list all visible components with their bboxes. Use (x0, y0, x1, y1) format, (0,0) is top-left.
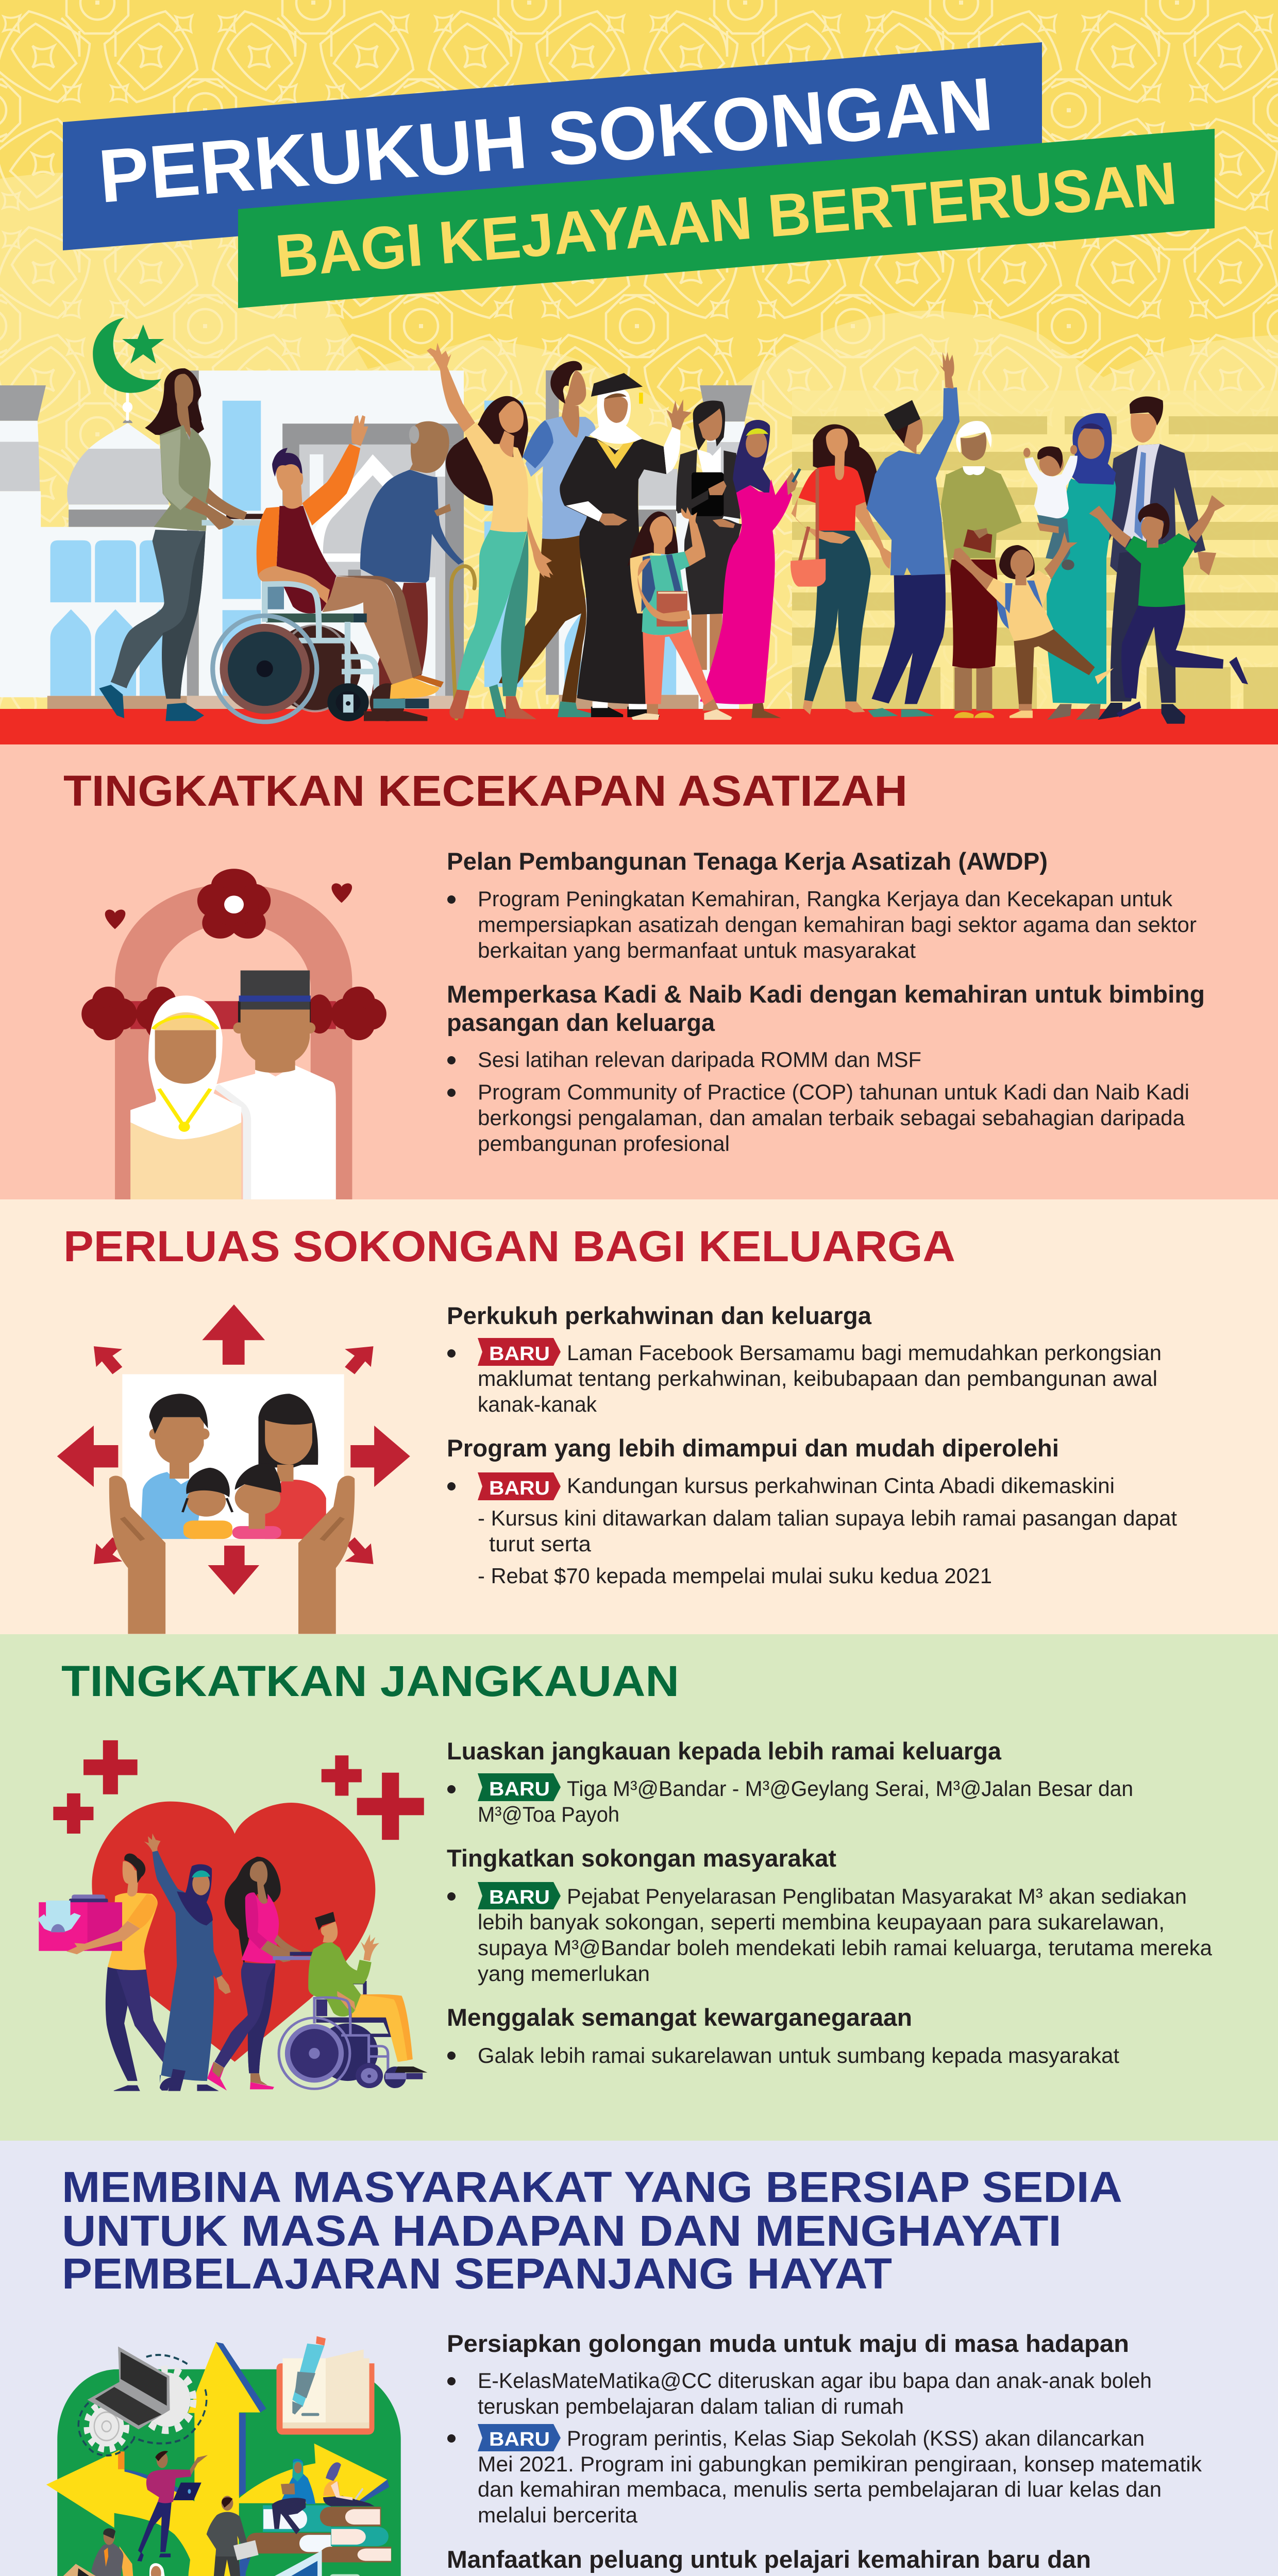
person with donation box (38, 1854, 179, 2091)
text block: program: Program yang lebih dimampui dan mudah diperolehi (447, 1434, 1059, 1462)
woman in teal with baby (1023, 413, 1116, 720)
man in suit (1098, 397, 1216, 724)
title line 2: BAGI KEJAYAAN BERTERUSAN (273, 149, 1179, 290)
woman in pink dress (700, 420, 800, 718)
woman in red top (791, 424, 892, 715)
text block: program: turut serta (489, 1532, 592, 1556)
text block: masyarakat: supaya M³@Bandar boleh mendekati lebih ramai keluarga, terutama mereka (478, 1936, 1213, 1960)
heading: TINGKATKAN KECEKAPAN ASATIZAH (63, 767, 907, 815)
text block: perkahwinan: Perkukuh perkahwinan dan keluarga (447, 1302, 872, 1329)
badge: BARU: BARU (489, 1478, 550, 1499)
badge: BARU: BARU (489, 1343, 550, 1365)
illustration: wedding couple under arch (81, 869, 386, 1199)
heading: MEMBINA MASYARAKAT YANG BERSIAP SEDIA (62, 2163, 1122, 2211)
text block: kewarganegaraan: Menggalak semangat kewarganegaraan (447, 2004, 912, 2031)
text block: golongan muda: Mei 2021. Program ini gabungkan pemikiran pengiraan, konsep matematik (478, 2452, 1202, 2476)
text block: AWDP: Program Peningkatan Kemahiran, Rangka Kerjaya dan Kecekapan untuk (478, 887, 1173, 911)
illustration: volunteers and heart (38, 1740, 427, 2091)
text block: golongan muda (447, 2330, 1202, 2527)
text block: Kadi: Program Community of Practice (COP) tahunan untuk Kadi dan Naib Kadi (478, 1080, 1189, 1104)
text block: keluarga: Tiga M³@Bandar - M³@Geylang Serai, M³@Jalan Besar dan (567, 1776, 1133, 1801)
badge: BARU (478, 1338, 561, 1366)
text block: golongan muda: teruskan pembelajaran dalam talian di rumah (478, 2394, 904, 2418)
yellow arrows (46, 2342, 389, 2576)
text block: masyarakat: Tingkatkan sokongan masyarakat (447, 1844, 836, 1872)
illustration: mosque and buildings, left (0, 317, 464, 709)
text block: Kadi: Sesi latihan relevan daripada ROMM dan MSF (478, 1047, 921, 1072)
banner: blue title strip (63, 42, 1042, 250)
badge: BARU (478, 2424, 561, 2451)
text block: masyarakat: lebih banyak sokongan, seperti membina keupayaan para sukarelawan, (478, 1910, 1165, 1934)
text block: perkahwinan: kanak-kanak (478, 1392, 597, 1416)
text block: Kadi: pembangunan profesional (478, 1131, 730, 1156)
text block: perkahwinan (447, 1302, 1162, 1416)
man in wheelchair (279, 1912, 427, 2089)
man in grey suit (207, 2496, 259, 2576)
woman in hijab waving (144, 1834, 231, 2091)
banner: green title strip (238, 129, 1215, 308)
heading: TINGKATKAN JANGKAUAN (61, 1657, 679, 1705)
badge: BARU: BARU (489, 1778, 550, 1800)
man in blue shirt (499, 361, 596, 717)
panel: hero background (0, 0, 1278, 721)
text block: masyarakat: yang memerlukan (478, 1961, 650, 1986)
decoration: right building stripes (792, 391, 1278, 710)
book stack with readers (246, 2459, 391, 2563)
heading: PERLUAS SOKONGAN BAGI KELUARGA (63, 1222, 955, 1270)
text block: AWDP: berkaitan yang bermanfaat untuk masyarakat (478, 938, 916, 962)
text block: Kadi: berkongsi pengalaman, dan amalan terbaik sebagai sebahagian daripada (478, 1106, 1185, 1130)
text block: kewarganegaraan (447, 2004, 1119, 2067)
text block: masyarakat: Pejabat Penyelarasan Penglibatan Masyarakat M³ akan sediakan (567, 1884, 1187, 1908)
text block: keluarga (447, 1737, 1133, 1826)
badge: BARU (478, 1472, 561, 1500)
text block: kemahiran baru: Manfaatkan peluang untuk pelajari kemahiran baru dan (447, 2546, 1091, 2573)
girl with book (627, 507, 732, 720)
heading: PEMBELAJARAN SEPANJANG HAYAT (62, 2249, 892, 2298)
man in blue baju with songkok (866, 352, 960, 717)
panel: tingkatkan jangkauan (0, 1634, 1278, 2141)
title line 1: PERKUKUH SOKONGAN (95, 61, 996, 218)
boy with backpack (953, 532, 1114, 718)
badge: BARU (478, 1773, 561, 1801)
illustration: centre group of people (427, 343, 800, 720)
text block: Kadi: Memperkasa Kadi & Naib Kadi dengan kemahiran untuk bimbing (447, 980, 1205, 1008)
text block: perkahwinan: maklumat tentang perkahwinan, keibubapaan dan pembangunan awal (478, 1366, 1157, 1391)
text block: keluarga: Luaskan jangkauan kepada lebih ramai keluarga (447, 1737, 1002, 1765)
text block: golongan muda: E-KelasMateMatika@CC diteruskan agar ibu bapa dan anak-anak boleh (478, 2368, 1152, 2393)
text block: masyarakat (447, 1844, 1213, 1986)
text block: Kadi: pasangan dan keluarga (447, 1009, 715, 1036)
text block: golongan muda: melalui bercerita (478, 2503, 638, 2527)
woman in black suit (676, 401, 742, 670)
text block: golongan muda: Persiapkan golongan muda untuk maju di masa hadapan (447, 2330, 1129, 2357)
text block: perkahwinan: Laman Facebook Bersamamu bagi memudahkan perkongsian (567, 1341, 1162, 1365)
tablet with chat (254, 2551, 340, 2576)
text block: keluarga: M³@Toa Payoh (478, 1802, 619, 1826)
illustration: right group of people (791, 352, 1248, 724)
graduate (560, 373, 692, 717)
panel: tingkatkan kecekapan asatizah (0, 744, 1278, 1199)
text block: AWDP: mempersiapkan asatizah dengan kemahiran bagi sektor agama dan sektor (478, 912, 1197, 937)
text block: Kadi (447, 980, 1205, 1156)
badge: BARU: BARU (489, 1887, 550, 1908)
text block: program: Kandungan kursus perkahwinan Cinta Abadi dikemaskini (567, 1473, 1115, 1498)
text block: program: - Kursus kini ditawarkan dalam talian supaya lebih ramai pasangan dapat (478, 1506, 1177, 1530)
person with laptop (137, 2451, 208, 2562)
illustration: old man with cane (360, 421, 464, 700)
open book and pen (277, 2336, 375, 2435)
text block: program: - Rebat $70 kepada mempelai mulai suku kedua 2021 (478, 1564, 992, 1588)
meeting table (57, 2528, 191, 2576)
boy in green (1089, 495, 1248, 717)
illustration: buildings, centre (484, 370, 752, 709)
text block: AWDP: Pelan Pembangunan Tenaga Kerja Asatizah (AWDP) (447, 848, 1048, 875)
badge: BARU: BARU (489, 2429, 550, 2450)
illustration: family photo with arrows (57, 1304, 410, 1634)
text block: golongan muda: Program perintis, Kelas Siap Sekolah (KSS) akan dilancarkan (567, 2426, 1145, 2450)
text block: kewarganegaraan: Galak lebih ramai sukarelawan untuk sumbang kepada masyarakat (478, 2043, 1119, 2067)
panel: perluas sokongan bagi keluarga (0, 1199, 1278, 1634)
badge: BARU (478, 1882, 561, 1909)
illustration: learning pathways (46, 2336, 412, 2576)
illustration: man in wheelchair (213, 415, 444, 722)
text block: AWDP (447, 848, 1197, 962)
text block: program (447, 1434, 1177, 1588)
heading: UNTUK MASA HADAPAN DAN MENGHAYATI (62, 2207, 1062, 2255)
gears and laptop (78, 2347, 207, 2455)
woman pushing wheelchair (207, 1857, 313, 2091)
woman waving in teal trousers (427, 343, 553, 719)
text block: golongan muda: dan kemahiran membaca, menulis serta pembelajaran di luar kelas dan (478, 2477, 1162, 2501)
heading (62, 2163, 1122, 2298)
illustration: woman pushing wheelchair (99, 368, 265, 721)
outline icons (330, 2575, 391, 2576)
grandmother (941, 421, 1022, 718)
red floor (0, 709, 1278, 744)
panel: membina masyarakat (0, 2141, 1278, 2576)
